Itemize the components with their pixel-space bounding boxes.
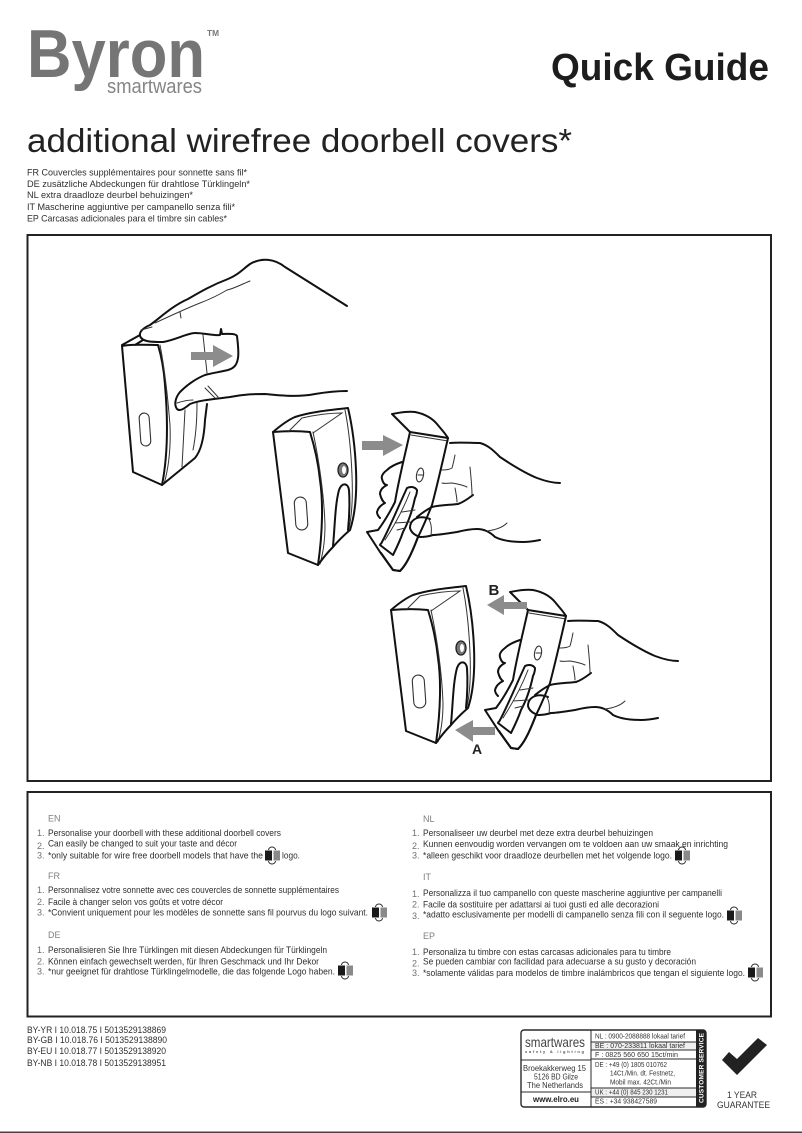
phone numbers: NL : 0900-2088888 lokaal tarief bbox=[595, 1034, 685, 1040]
text block: DE: 2. bbox=[37, 956, 45, 966]
text block: IT: 1. bbox=[412, 889, 420, 899]
text block: NL bbox=[412, 814, 728, 864]
text block: EN: Can easily be changed to suit your taste and décor bbox=[48, 838, 237, 848]
heading: Quick Guide: Quick Guide bbox=[551, 47, 769, 89]
arrow: A bbox=[455, 720, 495, 742]
text block: DE: 3. bbox=[37, 966, 45, 976]
text block: EP: Se pueden cambiar con facilidad para adecuarse a su gusto y decoración bbox=[423, 956, 696, 966]
text block: FR: FR bbox=[48, 871, 60, 881]
text block: NL: Personaliseer uw deurbel met deze extra deurbel behuizingen bbox=[423, 828, 653, 838]
guarantee: GUARANTEE bbox=[717, 1100, 770, 1110]
phone numbers: ES : +34 938427589 bbox=[595, 1098, 657, 1106]
arrow: pull right bbox=[191, 345, 233, 367]
text block: FR: Facile à changer selon vos goûts et votre décor bbox=[48, 897, 223, 907]
text block: EP: Personaliza tu timbre con estas carcasas adicionales para tu timbre bbox=[423, 947, 671, 957]
panel: customer service bbox=[521, 1030, 706, 1107]
text block: IT: Facile da sostituire per adattarsi ai tuoi gusti ed alle decorazioni bbox=[423, 900, 659, 910]
text block: NL: *alleen geschikt voor draadloze deurbellen met het volgende logo. bbox=[423, 850, 672, 860]
brand: smartwares: smartwares bbox=[525, 1034, 585, 1050]
text block: DE: *nur geeignet für drahtlose Türklingelmodelle, die das folgende Logo haben. bbox=[48, 966, 335, 976]
text block: NL: 1. bbox=[412, 828, 420, 838]
icon: cover logo bbox=[748, 964, 763, 981]
text block: IT: 2. bbox=[412, 900, 420, 910]
icon: check mark bbox=[722, 1038, 767, 1075]
text block: EN: 1. bbox=[37, 828, 45, 838]
text block: EP: 1. bbox=[412, 947, 420, 957]
panel: illustrations bbox=[28, 235, 771, 781]
text block: DE: DE bbox=[48, 930, 61, 940]
text block: EP: EP bbox=[423, 931, 435, 941]
subtitle translations: NL extra draadloze deurbel behuizingen* bbox=[27, 190, 193, 201]
icon: cover logo bbox=[675, 847, 690, 864]
text block: NL: 2. bbox=[412, 841, 420, 851]
address: Broekakkerweg 15 bbox=[523, 1063, 586, 1073]
logo: Byron smartwares: TM bbox=[207, 29, 219, 38]
website: www.elro.eu bbox=[532, 1094, 579, 1104]
icon: cover logo bbox=[372, 904, 387, 921]
phone numbers bbox=[595, 1034, 685, 1106]
text block: EN: *only suitable for wire free doorbell models that have the bbox=[48, 850, 263, 860]
text block: model numbers: BY-YR I 10.018.75 I 5013529138869 bbox=[27, 1025, 166, 1035]
arrow: B bbox=[487, 595, 527, 615]
text block: EN: 3. bbox=[37, 850, 45, 860]
phone numbers: DE : +49 (0) 1805 010762 bbox=[595, 1062, 667, 1069]
address bbox=[523, 1063, 586, 1090]
icon: cover logo bbox=[338, 962, 353, 979]
phone numbers: 14Ct./Min. dt. Festnetz, bbox=[610, 1070, 675, 1078]
label: A: A bbox=[472, 741, 482, 757]
text block: EP: 2. bbox=[412, 958, 420, 968]
phone numbers: F : 0825 560 650 15ct/min bbox=[595, 1052, 678, 1059]
icon: cover logo bbox=[265, 847, 280, 864]
subtitle translations: EP Carcasas adicionales para el timbre sin cables* bbox=[27, 214, 227, 224]
text block: IT: Personalizza il tuo campanello con queste mascherine aggiuntive per campanelli bbox=[423, 888, 722, 898]
text block: DE: 1. bbox=[37, 945, 45, 955]
text block: EN: Personalise your doorbell with these additional doorbell covers bbox=[48, 828, 281, 838]
text block: NL: NL bbox=[423, 814, 435, 824]
panel: instructions bbox=[28, 792, 771, 1016]
phone numbers: UK : +44 (0) 845 230 1231 bbox=[595, 1090, 668, 1096]
brand: smartwares bbox=[525, 1034, 585, 1054]
text block: EN bbox=[37, 814, 300, 864]
icon: cover logo bbox=[727, 907, 742, 924]
subtitle translations: IT Mascherine aggiuntive per campanello senza fili* bbox=[27, 202, 235, 213]
address: 5126 BD Gilze bbox=[534, 1072, 578, 1082]
label: customer service: CUSTOMER SERVICE bbox=[698, 1032, 706, 1103]
text block: FR bbox=[37, 871, 387, 921]
text block: DE bbox=[37, 930, 353, 979]
guarantee: 1 YEAR bbox=[727, 1090, 757, 1100]
title: additional wirefree doorbell covers* bbox=[27, 122, 572, 159]
illustration: cover removed from doorbell bbox=[273, 408, 560, 571]
subtitle translations bbox=[27, 168, 250, 224]
text block: EP: *solamente válidas para modelos de timbre inalámbricos que tengan el siguiente logo. bbox=[423, 968, 745, 978]
text block: FR: *Convient uniquement pour les modèles de sonnette sans fil pourvus du logo suivant. bbox=[48, 908, 368, 918]
text block: IT: 3. bbox=[412, 911, 420, 921]
text block: FR: 1. bbox=[37, 885, 45, 895]
phone numbers: BE : 070-233811 lokaal tarief bbox=[595, 1043, 685, 1050]
text block: FR: Personnalisez votre sonnette avec ces couvercles de sonnette supplémentaires bbox=[48, 885, 339, 895]
text block: model numbers: BY-EU I 10.018.77 I 5013529138920 bbox=[27, 1046, 166, 1056]
text block: EP: 3. bbox=[412, 968, 420, 978]
text block: EP bbox=[412, 931, 763, 981]
illustration: finger pulling off cover bbox=[122, 260, 347, 485]
text block: model numbers: BY-NB I 10.018.78 I 5013529138951 bbox=[27, 1058, 166, 1068]
text block: FR: 2. bbox=[37, 897, 45, 907]
text block: IT: IT bbox=[423, 872, 432, 882]
text block: IT bbox=[412, 872, 742, 924]
text block: model numbers: BY-GB I 10.018.76 I 5013529138890 bbox=[27, 1035, 167, 1045]
arrow: cover moves right bbox=[362, 435, 403, 456]
brand: smartwares: safety & lighting bbox=[525, 1049, 585, 1054]
illustration: new cover fitted bbox=[391, 582, 678, 757]
logo: Byron smartwares: Byron bbox=[27, 16, 205, 92]
guarantee bbox=[717, 1038, 770, 1110]
phone numbers: Mobil max. 42Ct./Min bbox=[610, 1080, 671, 1086]
text block: NL: Kunnen eenvoudig worden vervangen om te voldoen aan uw smaak en inrichting bbox=[423, 839, 728, 849]
logo: Byron smartwares: smartwares bbox=[107, 76, 202, 98]
text block: model numbers bbox=[27, 1025, 167, 1068]
text block: EN: EN bbox=[48, 814, 61, 824]
label: B: B bbox=[488, 582, 500, 599]
text block: DE: Können einfach gewechselt werden, für Ihren Geschmack und Ihr Dekor bbox=[48, 956, 319, 966]
subtitle translations: DE zusätzliche Abdeckungen für drahtlose Türklingeln* bbox=[27, 179, 250, 190]
address: The Netherlands bbox=[527, 1080, 583, 1090]
text block: DE: Personalisieren Sie Ihre Türklingen mit diesen Abdeckungen für Türklingeln bbox=[48, 945, 327, 955]
text block: EN: 2. bbox=[37, 841, 45, 851]
text block: NL: 3. bbox=[412, 850, 420, 860]
text block: EN: logo. bbox=[282, 850, 300, 860]
text block: FR: 3. bbox=[37, 908, 45, 918]
subtitle translations: FR Couvercles supplémentaires pour sonnette sans fil* bbox=[27, 168, 247, 178]
text block: IT: *adatto esclusivamente per modelli di campanello senza fili con il seguente logo. bbox=[423, 910, 724, 920]
